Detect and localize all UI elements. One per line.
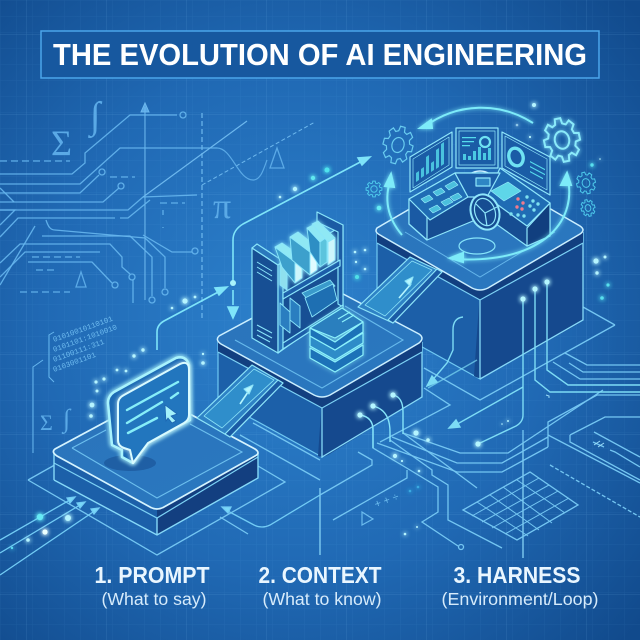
gear: large right <box>540 115 584 165</box>
flow arrows at bottom left <box>0 495 320 575</box>
control keys <box>421 181 521 213</box>
binary data block <box>33 316 119 453</box>
ramp: prompt to context <box>197 365 283 437</box>
ramp: context to harness <box>358 257 442 323</box>
icon: cursor <box>165 405 177 423</box>
label: harness: (Environment/Loop) <box>442 589 598 609</box>
label: prompt: (What to say) <box>102 589 206 609</box>
math symbols and chart sketch: π <box>213 186 231 226</box>
harness block <box>376 171 583 379</box>
gear: small lower right <box>579 198 597 218</box>
gear: left <box>379 123 417 167</box>
math symbols and chart sketch: Σ <box>51 123 72 163</box>
label: context: (What to know) <box>262 589 382 609</box>
gear: small far left <box>366 181 382 197</box>
monitor charts <box>416 137 545 182</box>
harness cockpit console <box>409 128 550 246</box>
title: THE EVOLUTION OF AI ENGINEERING <box>53 38 587 72</box>
connector into context <box>157 157 370 350</box>
books top shelf <box>275 221 335 290</box>
loop arrows around console <box>385 108 571 262</box>
loop symbol on deck <box>459 238 495 254</box>
monitors <box>410 128 550 195</box>
circuit traces left <box>0 112 217 303</box>
buttons <box>509 195 540 218</box>
binary data block: 01100111:311 <box>52 339 106 365</box>
label: context <box>258 562 382 609</box>
title <box>41 31 599 78</box>
icon: chat bubble <box>104 357 190 471</box>
label: prompt: 1. PROMPT <box>94 562 210 588</box>
lower shelf binders and folders <box>280 280 337 333</box>
label: context: 2. CONTEXT <box>258 562 382 588</box>
binary data block: 0101101:1010010 <box>52 324 119 355</box>
prompt block <box>53 397 258 535</box>
gear: small right <box>574 170 598 196</box>
binary data block: Σ <box>40 410 53 435</box>
math glyphs lower right: + + ÷ <box>373 491 401 511</box>
gears <box>366 115 598 218</box>
math symbols and chart sketch: ∫ <box>88 95 103 139</box>
console desks <box>409 168 550 246</box>
label: harness: 3. HARNESS <box>454 562 580 588</box>
data dots <box>11 103 610 549</box>
context pins <box>357 392 403 448</box>
binary data block: 01010010110101 <box>52 316 115 345</box>
book stack <box>310 308 363 372</box>
floor grid <box>463 472 578 540</box>
label: harness <box>442 562 598 609</box>
bookshelf <box>252 212 363 372</box>
harness trace pins <box>427 279 640 447</box>
label: prompt <box>94 562 210 609</box>
binary data block: 0103001101 <box>52 352 98 375</box>
math glyphs lower right <box>362 395 604 525</box>
ground plates and traces <box>28 307 640 558</box>
binary data block: ∫ <box>61 404 72 434</box>
context block <box>217 284 422 457</box>
steering wheel <box>466 190 504 234</box>
math symbols and chart sketch <box>51 95 315 320</box>
